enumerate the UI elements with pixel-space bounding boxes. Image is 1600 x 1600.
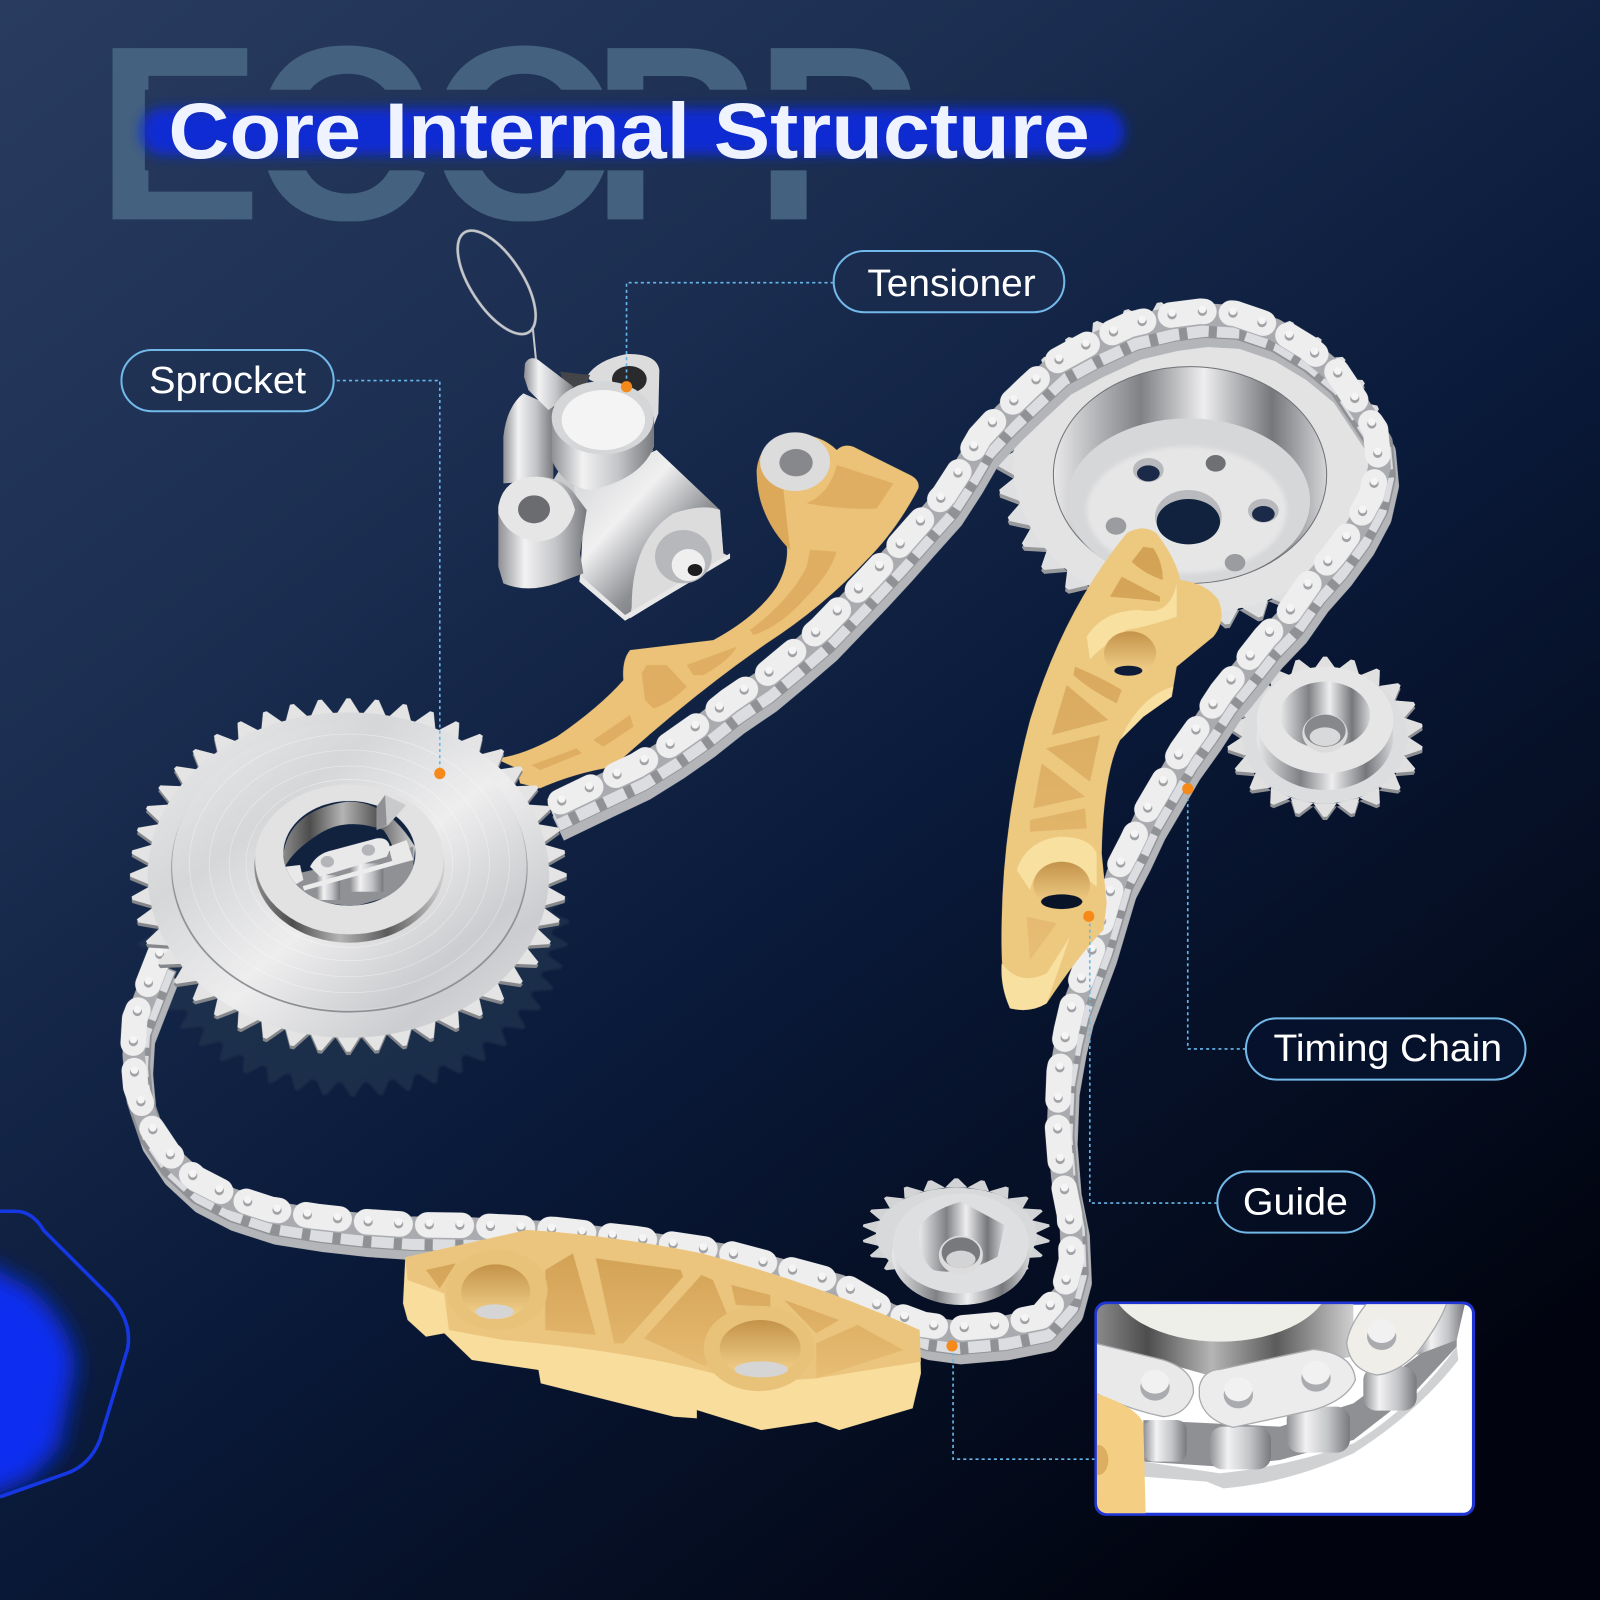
mounting lug [498, 477, 587, 588]
brushed step ring [172, 725, 527, 1012]
retaining ring [443, 218, 551, 360]
tensioner [443, 218, 730, 621]
label: Sprocket [121, 350, 334, 411]
ghost brand lettering [112, 46, 910, 222]
label: Sprocket: Sprocket [149, 359, 307, 401]
leader lines [337, 283, 1246, 1459]
title with blue glow: Core Internal Structure [168, 87, 1090, 175]
small bottom sprocket [858, 1175, 1057, 1305]
bolt holes [1106, 455, 1279, 571]
ghost brand lettering: P [754, 0, 920, 272]
hub [254, 789, 444, 943]
marker dots [434, 381, 1193, 1352]
label: Timing Chain: Timing Chain [1273, 1027, 1502, 1069]
ghost brand lettering: O [428, 0, 621, 272]
label: Guide [1217, 1171, 1374, 1233]
chain seen through the hub [283, 802, 415, 907]
nozzle [655, 530, 712, 583]
label: Tensioner: Tensioner [867, 262, 1036, 304]
guide: upper [495, 432, 919, 788]
cylinder [552, 417, 654, 490]
label: Guide: Guide [1243, 1180, 1348, 1222]
timing chain [133, 309, 1386, 1351]
large left sprocket [130, 698, 567, 1056]
ghost brand lettering: P [591, 0, 757, 272]
large right sprocket [966, 277, 1407, 653]
sprocket shadow [69, 700, 636, 1143]
label: Tensioner [834, 251, 1064, 312]
guide: bottom [403, 1230, 921, 1430]
decorative blue hexagon [0, 1211, 128, 1510]
guide: right [1001, 528, 1222, 1010]
ghost brand lettering: C [252, 0, 432, 272]
label: Timing Chain [1246, 1018, 1526, 1080]
inset: chain close-up [1094, 1302, 1475, 1516]
washer [760, 432, 830, 491]
ghost brand lettering: E [96, 0, 262, 272]
small right sprocket [1222, 652, 1431, 826]
